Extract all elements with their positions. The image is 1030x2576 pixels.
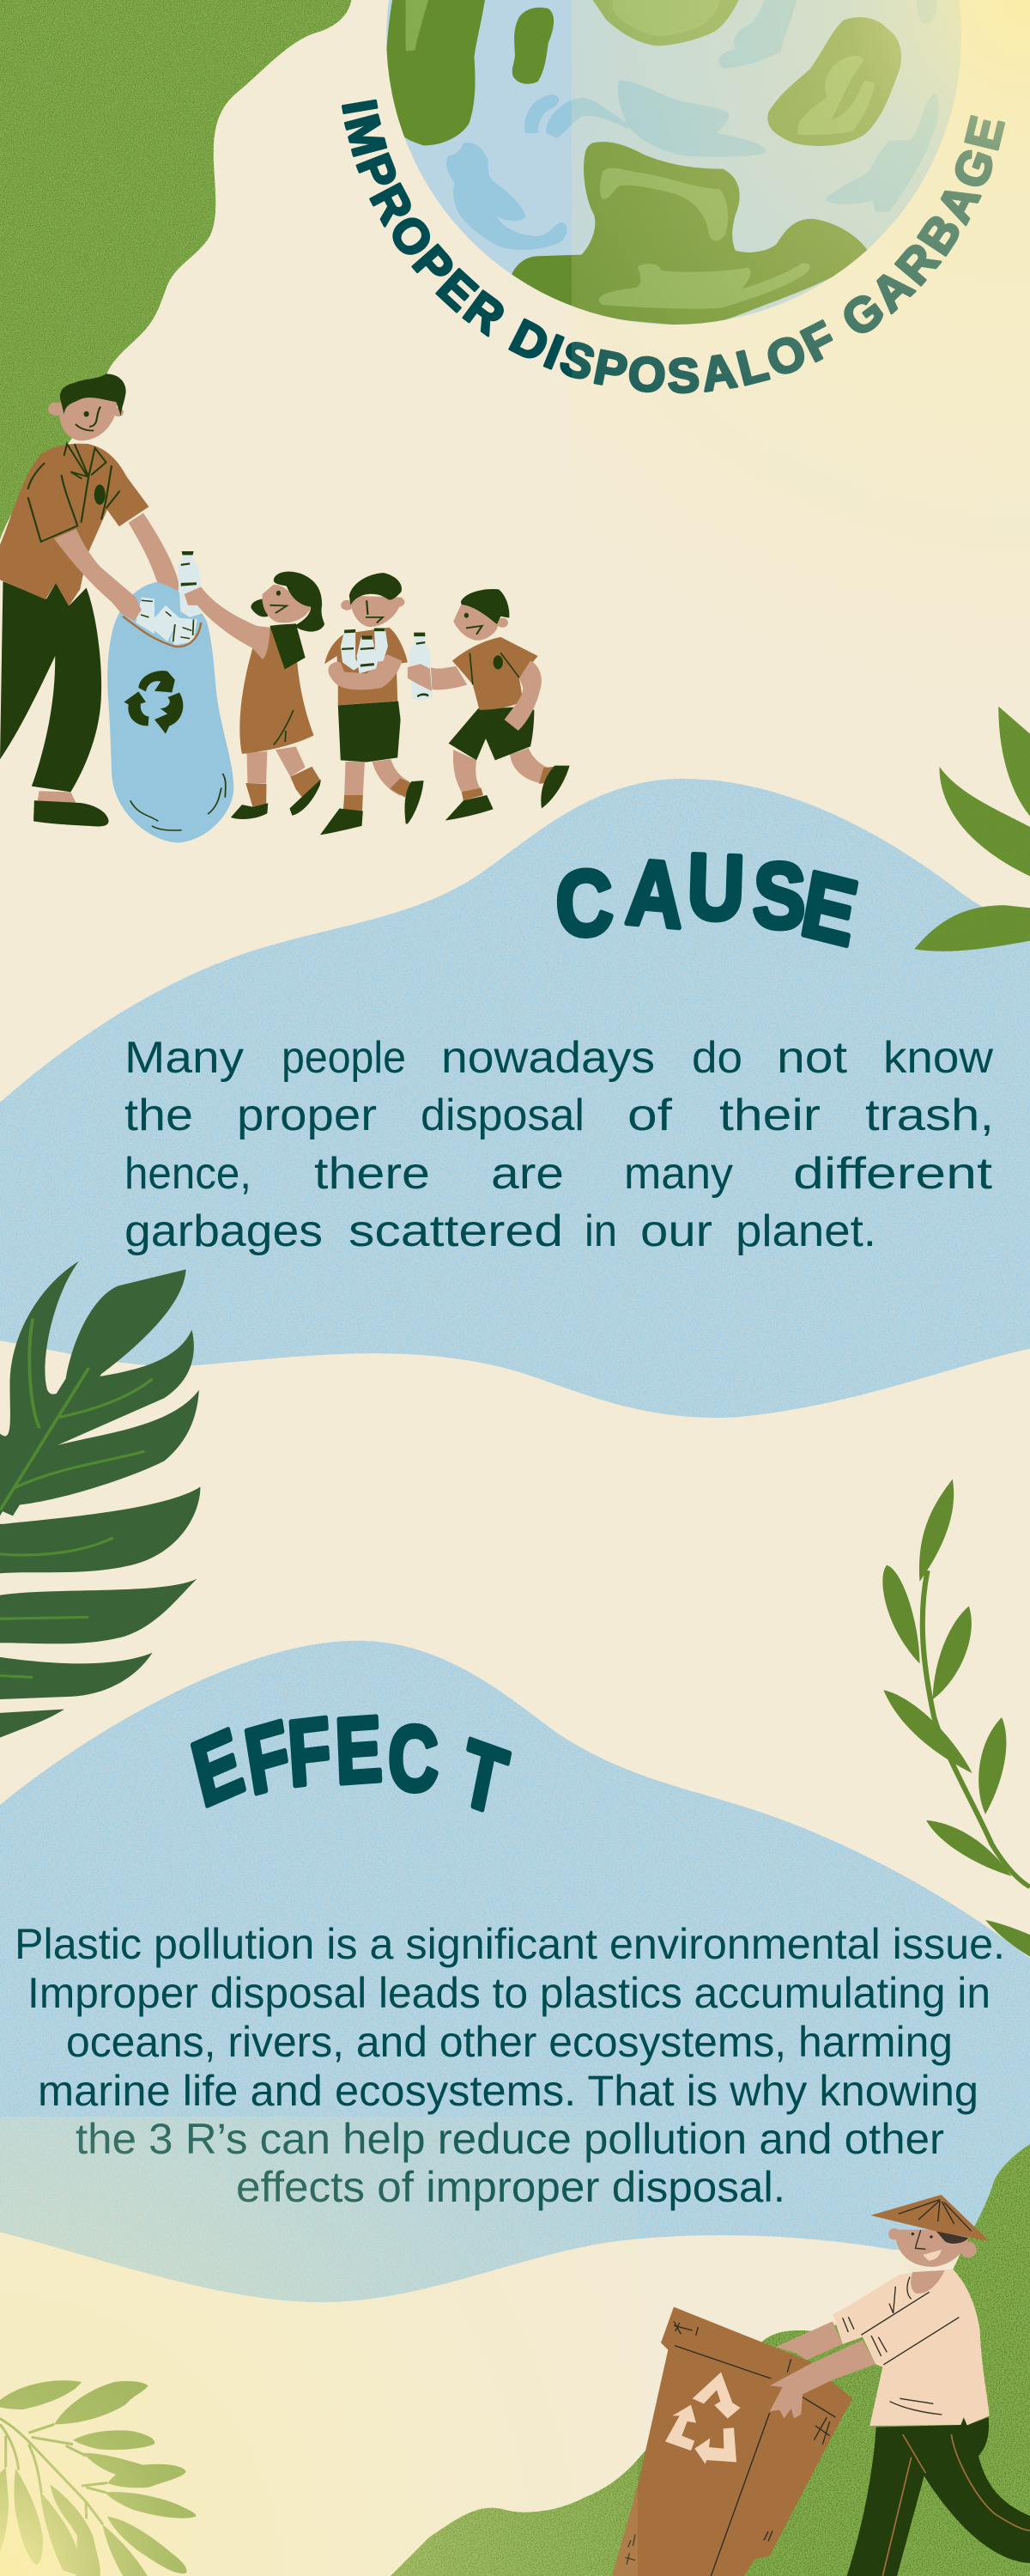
text block: effect body: effects of improper disposal. bbox=[236, 2163, 785, 2211]
text block: cause body: are bbox=[491, 1149, 564, 1199]
branch leaf: right side bbox=[882, 1479, 1030, 1957]
recycling bin bbox=[612, 2307, 852, 2576]
man's trousers bbox=[847, 2417, 1030, 2576]
text block: effect body: Plastic pollution is a significant environmental issue. bbox=[15, 1920, 1005, 1968]
panel: cause blue blob bbox=[0, 779, 1030, 1418]
text block: cause body: scattered bbox=[348, 1206, 563, 1256]
gradient glow overlays bbox=[572, 0, 1030, 730]
man bbox=[0, 374, 179, 826]
text block: cause body: disposal bbox=[421, 1091, 585, 1140]
boy holding bottles bbox=[320, 573, 424, 835]
man's shirt, arms and face bbox=[770, 2195, 990, 2426]
globe: continents bbox=[386, 0, 901, 325]
text block: cause body: planet. bbox=[736, 1206, 876, 1256]
text block: cause body: trash, bbox=[865, 1091, 994, 1140]
illustration: family collecting bottles bbox=[0, 374, 570, 843]
heading: CAUSE: CAUSE bbox=[554, 835, 864, 966]
text block: cause body: hence, bbox=[124, 1149, 251, 1199]
leaf sprig: bottom left bbox=[0, 2380, 196, 2576]
title: curved heading: IMPROPER DISPOSALOF GARBAGE bbox=[342, 100, 1006, 394]
text block: effect body: Improper disposal leads to plastics accumulating in bbox=[27, 1969, 991, 2017]
text block: cause body: their bbox=[719, 1091, 821, 1140]
globe: water patches bbox=[446, 0, 939, 250]
text block: effect body: marine life and ecosystems. That is why knowing bbox=[38, 2067, 978, 2115]
panel: effect blue blob bbox=[0, 1641, 1030, 2302]
text block: cause body: not bbox=[777, 1033, 848, 1083]
globe bbox=[386, 0, 961, 325]
text block: cause body: of bbox=[627, 1091, 673, 1140]
text block: cause body bbox=[124, 1033, 994, 1256]
man's forearm and bottle bbox=[54, 529, 203, 621]
text block: cause body: Many bbox=[124, 1033, 244, 1083]
heading: EFFECT: EFFECT bbox=[184, 1698, 514, 1835]
boy walking with bottle bbox=[408, 589, 570, 821]
garbage bag with recycle symbol bbox=[107, 582, 233, 843]
girl bbox=[185, 572, 324, 819]
text block: cause body: proper bbox=[237, 1091, 377, 1140]
monstera leaf bbox=[0, 1261, 200, 1738]
green blob: bottom right bbox=[391, 2144, 1030, 2576]
text block: cause body: people bbox=[282, 1033, 406, 1083]
illustration: man pushing recycling bin bbox=[612, 2195, 1030, 2576]
text block: cause body: our bbox=[640, 1206, 712, 1256]
text block: cause body: the bbox=[124, 1091, 193, 1140]
text block: cause body: nowadays bbox=[441, 1033, 655, 1083]
text block: cause body: know bbox=[883, 1033, 993, 1083]
text block: effect body: the 3 R’s can help reduce pollution and other bbox=[76, 2115, 944, 2163]
text block: cause body: there bbox=[314, 1149, 430, 1199]
text block: effect body: oceans, rivers, and other ecosystems, harming bbox=[66, 2018, 953, 2066]
text block: cause body: do bbox=[692, 1033, 742, 1083]
text block: cause body: garbages bbox=[124, 1206, 323, 1256]
green blob: top left bbox=[0, 0, 351, 539]
leaves: top right cluster bbox=[914, 707, 1030, 951]
text block: cause body: different bbox=[793, 1149, 993, 1199]
text block: effect body bbox=[15, 1920, 1005, 2211]
text block: cause body: in bbox=[585, 1206, 617, 1256]
text block: cause body: many bbox=[624, 1149, 733, 1199]
